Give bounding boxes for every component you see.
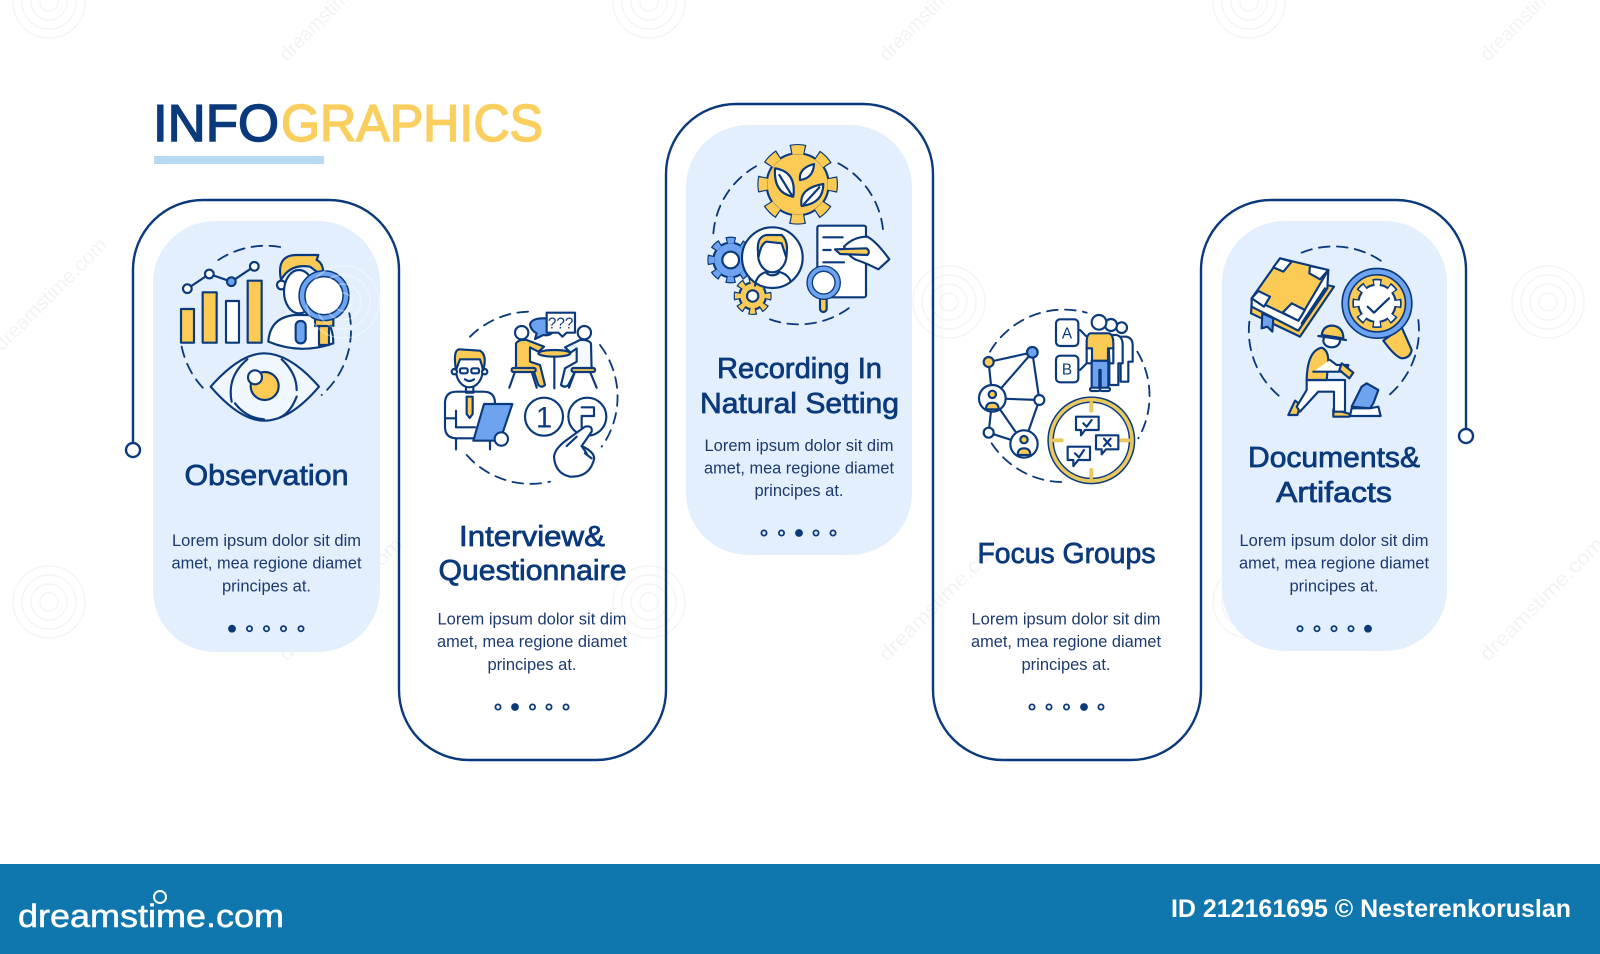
pagination dots — [1297, 626, 1371, 632]
title — [153, 95, 543, 153]
body text: principes at. — [488, 656, 576, 674]
panel: recording in natural setting — [686, 125, 912, 555]
footer logo: dreamstime.com — [18, 898, 284, 934]
body text: principes at. — [1022, 656, 1110, 674]
pagination dots — [229, 626, 304, 632]
panel: observation — [153, 221, 380, 652]
body text: Lorem ipsum dolor sit dim — [172, 532, 361, 550]
heading: documents and artifacts: Documents& — [1248, 442, 1420, 474]
body text — [1239, 532, 1429, 596]
icon: interview, table talk and numbered choices: 1 — [536, 401, 552, 434]
footer credit: ID 212161695 © Nesterenkoruslan — [1171, 895, 1571, 923]
body text: Lorem ipsum dolor sit dim — [972, 610, 1160, 628]
body text — [704, 437, 894, 500]
panel: interview and questionnaire — [437, 312, 627, 710]
body text — [437, 610, 627, 674]
heading: interview and questionnaire: Interview& — [459, 521, 605, 553]
icon: leaf gear, gears, person and document — [711, 150, 889, 324]
heading: recording in natural setting — [700, 353, 899, 420]
body text: Lorem ipsum dolor sit dim — [704, 437, 894, 455]
heading: documents and artifacts: Artifacts — [1276, 477, 1392, 509]
heading: observation: Observation — [184, 460, 348, 492]
heading: focus groups: Focus Groups — [978, 538, 1156, 570]
body text: amet, mea regione diamet — [704, 460, 894, 478]
body text: amet, mea regione diamet — [971, 633, 1161, 651]
pagination dots — [1029, 704, 1104, 710]
body text — [971, 610, 1161, 674]
body text: Lorem ipsum dolor sit dim — [1240, 532, 1428, 550]
watermark: faint spirals and diagonal marks: dreamstime.com — [275, 533, 407, 666]
body text: amet, mea regione diamet — [437, 633, 627, 651]
title underline — [154, 156, 324, 164]
body text: Lorem ipsum dolor sit dim — [438, 610, 626, 628]
icon: interview, table talk and numbered choices: ??? — [548, 316, 573, 333]
panel: focus groups — [971, 310, 1161, 710]
title: GRAPHICS — [281, 95, 543, 153]
body text — [172, 532, 362, 596]
watermark: faint spirals and diagonal marks: dreamstime.com — [875, 533, 1007, 666]
panel: documents and artifacts — [1222, 221, 1447, 651]
icon: book, magnifier and archaeologist — [1249, 246, 1419, 417]
icon: observation eye, chart and analyst — [181, 246, 351, 421]
heading: interview and questionnaire: Questionnaire — [438, 555, 626, 587]
icon: people, choices, network and target — [979, 310, 1150, 482]
heading: recording in natural setting: Natural Setting — [700, 388, 899, 420]
heading: recording in natural setting: Recording In — [717, 353, 882, 385]
connected outline frame — [126, 104, 1473, 760]
watermark: faint spirals and diagonal marks: dreamstime.com — [1476, 533, 1600, 666]
body text: amet, mea regione diamet — [172, 554, 362, 572]
pagination dots — [495, 704, 569, 710]
footer bar — [0, 864, 1600, 954]
icon: people, choices, network and target: A — [1062, 325, 1073, 342]
body text: principes at. — [754, 482, 844, 500]
watermark spiral over first panel — [307, 266, 379, 338]
heading: documents and artifacts — [1248, 442, 1420, 509]
heading: interview and questionnaire — [438, 521, 626, 587]
body text: principes at. — [1290, 578, 1378, 596]
icon: people, choices, network and target: B — [1062, 362, 1072, 379]
title: INFO — [153, 95, 279, 153]
pagination dots — [761, 530, 836, 536]
watermark: faint spirals and diagonal marks — [0, 0, 1600, 666]
body text: amet, mea regione diamet — [1239, 554, 1429, 572]
body text: principes at. — [222, 578, 311, 596]
icon: interview, table talk and numbered choices — [445, 312, 618, 484]
